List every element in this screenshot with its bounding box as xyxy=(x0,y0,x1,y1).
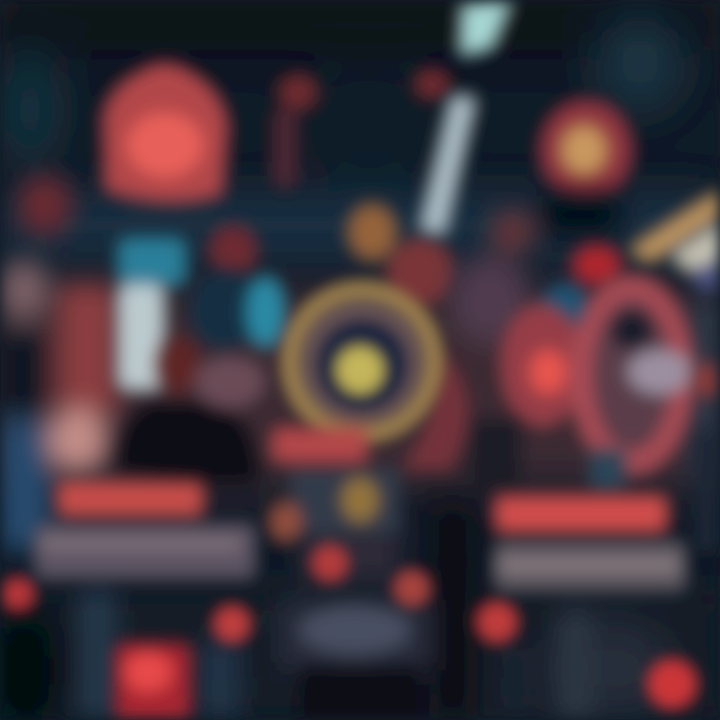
emblem: right pink ring with bright spot xyxy=(500,287,692,463)
small red hanging figure xyxy=(272,69,450,188)
red cap and blue shirt xyxy=(540,245,621,340)
light bar: top xyxy=(460,0,512,56)
red lights: bottom row xyxy=(2,545,696,708)
figures: right crowd xyxy=(450,195,720,480)
lantern: left xyxy=(103,64,228,202)
dark gap and low right shapes xyxy=(470,362,720,550)
figure: cyan sleeve xyxy=(189,270,285,350)
figure: seated dark xyxy=(116,337,265,484)
red lantern: bottom left xyxy=(116,644,190,720)
legs and dark columns: lower half xyxy=(0,500,590,720)
figure: blue and white shirt xyxy=(118,225,257,390)
table: left xyxy=(35,482,255,578)
central podium xyxy=(269,428,400,542)
table: right xyxy=(495,496,685,590)
rainbow stripes: right edge xyxy=(628,190,720,290)
light bar: slanted xyxy=(420,95,476,235)
central ring emblem xyxy=(290,290,434,434)
central maroon arc xyxy=(400,350,468,470)
crowd figures: left xyxy=(0,175,116,550)
figure: central head xyxy=(348,204,454,306)
emblem: upper right xyxy=(540,100,632,200)
seated figure: bottom centre xyxy=(300,606,420,720)
